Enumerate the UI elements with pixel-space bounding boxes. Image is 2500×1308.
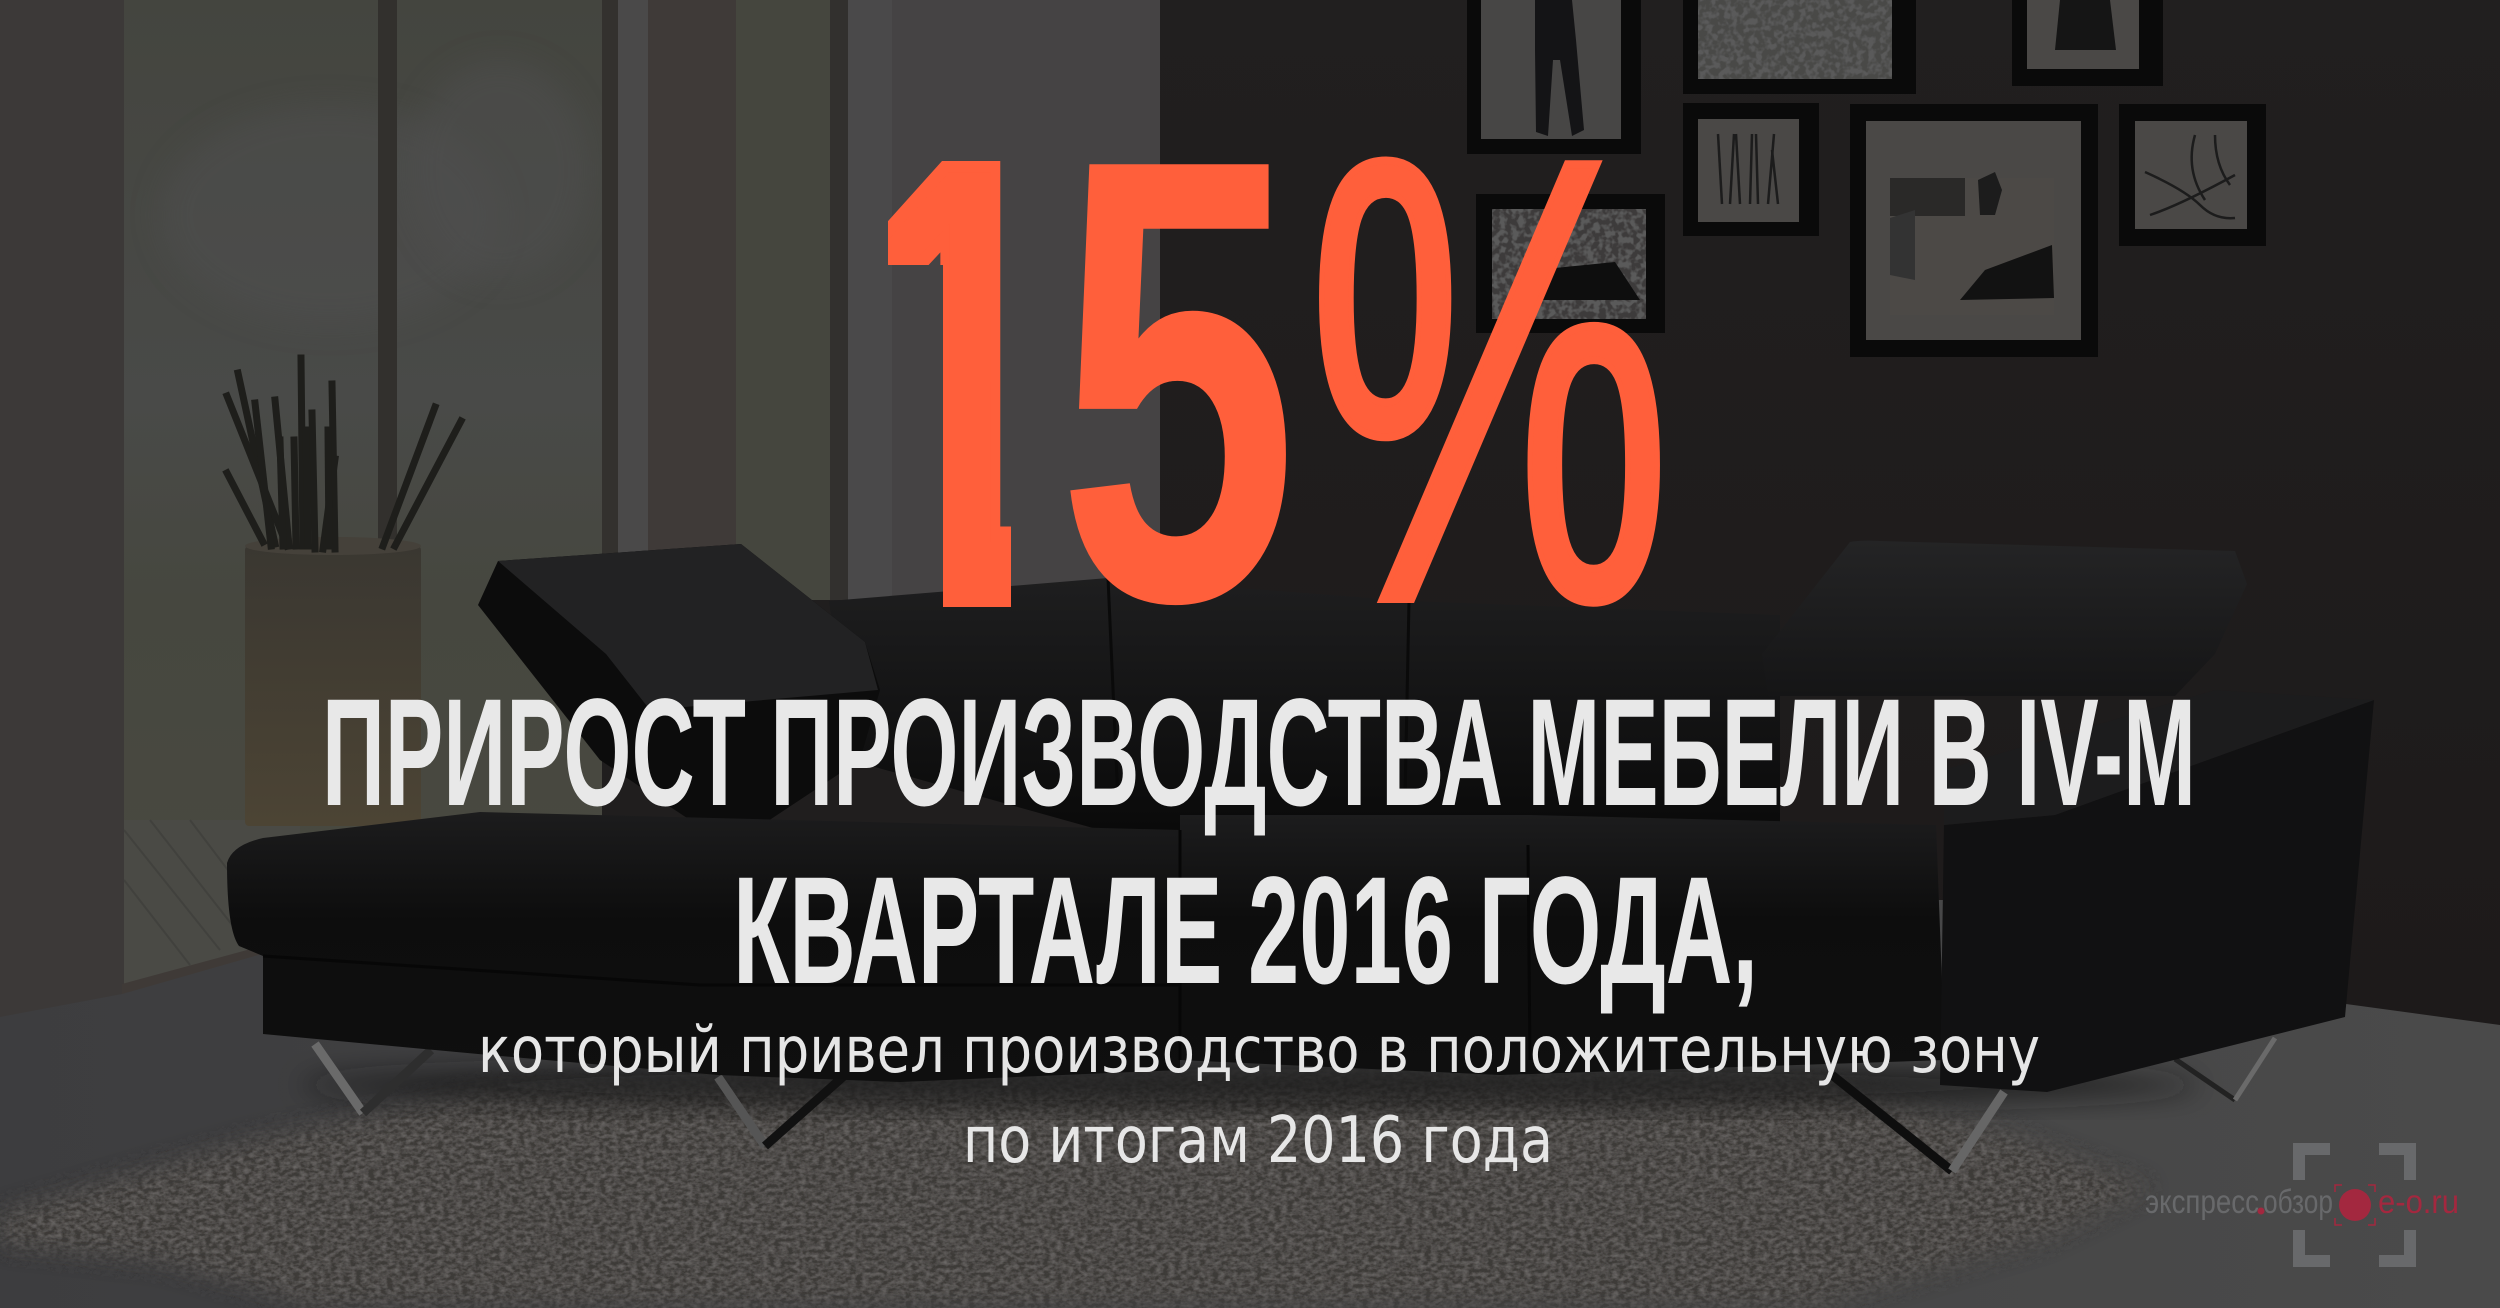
deck outside the window xyxy=(122,820,300,996)
window wall with panes and mullions xyxy=(0,0,1160,1020)
right headrest xyxy=(1762,541,2247,696)
rug xyxy=(0,1080,2151,1308)
logo marks red: e-o.ru xyxy=(2378,1183,2459,1220)
subheading xyxy=(478,1014,2040,1178)
frame: reeds print xyxy=(1683,103,1819,236)
watermark logo xyxy=(2145,1143,2459,1267)
big number: 15%: % xyxy=(1307,27,1672,733)
logo text grey: экспресс xyxy=(2145,1183,2259,1220)
heading xyxy=(322,667,2196,1016)
frame: standing figure xyxy=(1467,0,1641,154)
sofa legs xyxy=(315,1038,2275,1171)
sofa xyxy=(227,541,2374,1092)
viewfinder corners xyxy=(2293,1143,2416,1267)
left chaise xyxy=(227,812,1180,1082)
frame: branches print xyxy=(2119,104,2266,246)
subheading: по итогам 2016 года xyxy=(963,1104,1553,1178)
frame: couple print xyxy=(2012,0,2163,86)
big number: 15%: 5 xyxy=(1057,27,1298,733)
floor xyxy=(0,900,2500,1308)
logo marks red xyxy=(2258,1183,2459,1225)
heading: КВАРТАЛЕ 2016 ГОДА, xyxy=(733,845,1758,1016)
big number: 15%: 1 xyxy=(859,27,1064,733)
subheading: который привел производство в положительную зону xyxy=(478,1014,2040,1088)
vase with sticks xyxy=(227,358,461,826)
right arm xyxy=(1940,690,2374,1092)
sofa shadow xyxy=(300,1060,2200,1110)
big number: 15% xyxy=(888,156,1660,607)
frame: map print xyxy=(1683,0,1916,94)
right seats xyxy=(1180,815,1945,1075)
picture frames on the wall xyxy=(1467,0,2266,357)
back cushions xyxy=(829,578,1780,830)
frame: car print xyxy=(1476,194,1665,333)
logo text grey: обзор xyxy=(2263,1183,2333,1220)
left headrest xyxy=(478,544,880,823)
frame: large photo xyxy=(1850,104,2098,357)
wall xyxy=(1160,0,2500,1030)
